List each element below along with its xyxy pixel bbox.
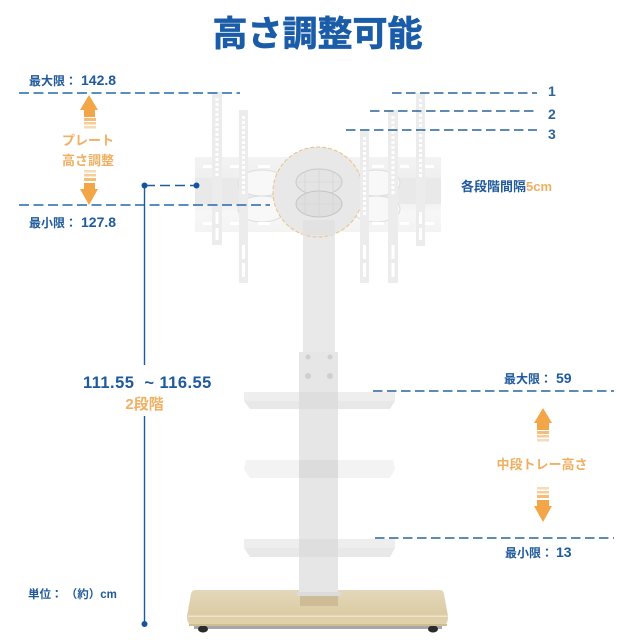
vertical brackets: [212, 92, 425, 283]
shelf height: minimum label: 13: [556, 544, 572, 560]
shelf height label: 中段トレー高さ: [496, 457, 588, 472]
plate height: maximum label: 最大限：: [29, 73, 77, 88]
unit note: 単位： （約）cm: [28, 587, 117, 601]
shelf height: maximum label: 最大限：: [504, 371, 552, 386]
plate height: maximum label: 142.8: [81, 72, 116, 88]
bottom shelf: [244, 539, 395, 557]
icon: shelf down arrow: [534, 487, 552, 522]
bracket step lines 1 2 3: [346, 83, 556, 142]
column: [297, 232, 341, 596]
bracket step lines 1 2 3: 2: [548, 106, 556, 122]
shelf height: minimum label: [505, 544, 572, 560]
plate height adjustment label: プレート: [62, 133, 114, 148]
two-step label: 2段階: [125, 395, 164, 413]
shelf height: minimum dashed line: [375, 537, 614, 539]
shelf height: maximum dashed line: [373, 390, 614, 392]
top shelf: [244, 392, 395, 409]
plate height: maximum label: [29, 72, 116, 88]
plate height: minimum label: 127.8: [81, 214, 116, 230]
middle shelf: [244, 460, 395, 478]
base: wood board: [187, 590, 448, 632]
icon: orange down arrow: [80, 170, 98, 205]
total height range label: 111.55 ~ 116.55: [83, 374, 212, 392]
icon: orange up arrow: [80, 95, 98, 128]
mounting plate: [195, 157, 441, 232]
bracket step lines 1 2 3: 1: [548, 83, 556, 99]
plate height adjustment label: 高さ調整: [62, 153, 114, 168]
bracket step lines 1 2 3: 3: [548, 126, 556, 142]
highlight circle with centre mount: [273, 147, 363, 237]
stand illustration: [187, 92, 448, 632]
shelf height: maximum label: 59: [556, 370, 572, 386]
plate height: minimum label: 最小限：: [29, 216, 77, 230]
icon: shelf up arrow: [534, 408, 552, 442]
shelf height: maximum label: [504, 370, 572, 386]
plate height adjustment label: [62, 133, 114, 168]
plate height: minimum dashed line: [19, 204, 270, 206]
plate height: minimum label: [29, 214, 116, 230]
step interval label: 5cm: [526, 179, 552, 194]
plate height: maximum dashed line: [19, 92, 240, 94]
title: 高さ調整可能: [212, 15, 423, 54]
step interval label: 各段階間隔: [461, 179, 526, 194]
shelf height: minimum label: 最小限：: [505, 546, 553, 560]
total height dimension line: [142, 182, 200, 627]
